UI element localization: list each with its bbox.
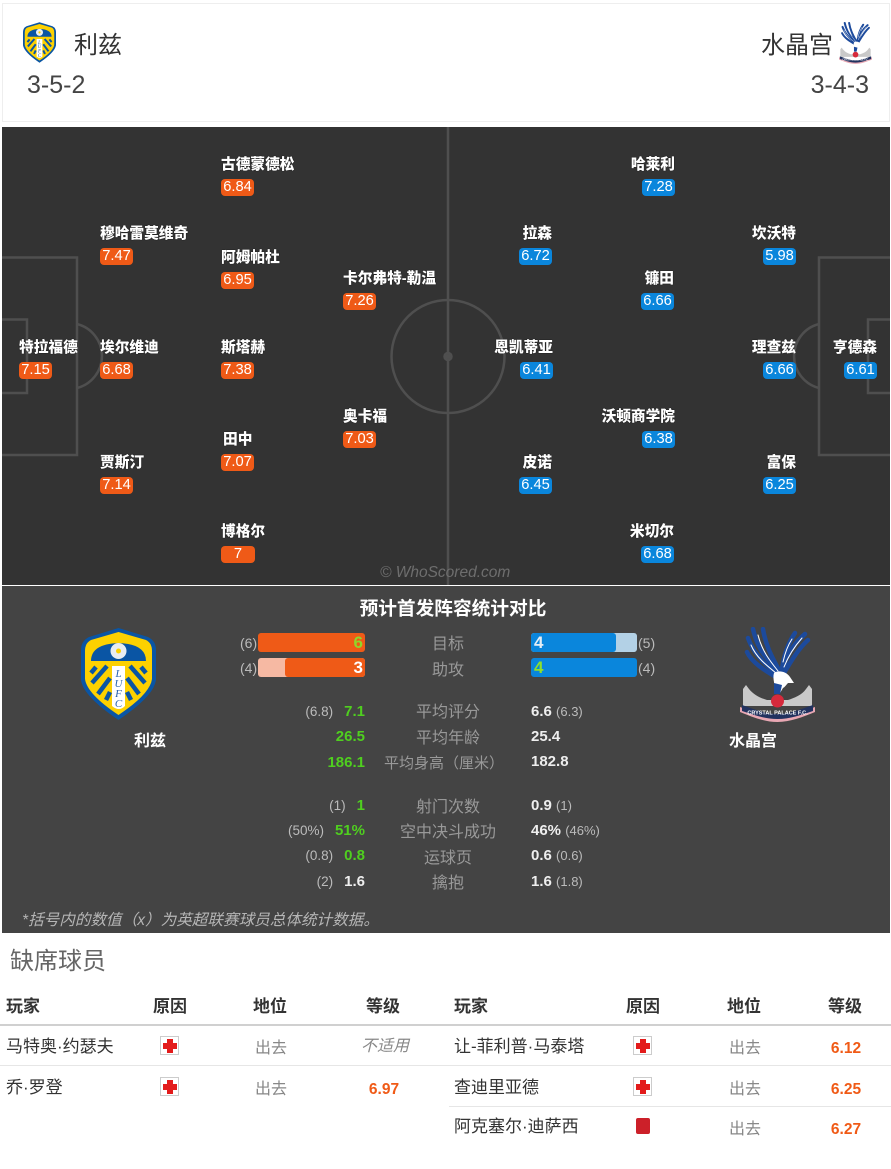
player: 拉森: 6.72: [521, 248, 550, 264]
column headers: 玩家: [6, 997, 40, 1016]
player: 拉森: [519, 224, 552, 265]
player: 亨德森: 6.61: [846, 362, 875, 378]
player: 斯塔赫: [221, 338, 265, 379]
player: 特拉福德: 特拉福德: [19, 340, 78, 356]
player: 古德蒙德松: 古德蒙德松: [221, 157, 294, 173]
label: average age: 平均年龄: [416, 730, 480, 747]
row: 马特奥·约瑟夫: [0, 1025, 449, 1065]
player: 埃尔维迪: 6.68: [102, 362, 131, 378]
away height: 182.8: [531, 753, 569, 770]
goals bar: away: [531, 633, 655, 652]
column headers: 地位: [253, 997, 287, 1016]
player: 理查兹: 理查兹: [752, 340, 796, 356]
row: 阿克塞尔·迪萨西: 出去: [729, 1121, 761, 1138]
home rating: (6.8) 7.1: [305, 703, 365, 720]
player: 田中: 7.07: [223, 454, 252, 470]
label: tackles: 擒抱: [432, 875, 464, 892]
away dribbles: 0.6 (0.6): [531, 847, 583, 864]
row: 查迪里亚德: 6.25: [831, 1081, 861, 1098]
assists bar: home: 3: [354, 658, 363, 677]
goals bar: away: (5): [638, 635, 655, 651]
player: 斯塔赫: 7.38: [223, 362, 252, 378]
footnote: *括号内的数值（x）为英超联赛球员总体统计数据。: [22, 912, 379, 929]
panel: away missing players table: [449, 990, 891, 1150]
goals bar: home: (6): [240, 635, 257, 651]
player: 贾斯汀: [100, 454, 144, 494]
player: 皮诺: 皮诺: [523, 455, 552, 471]
home height: 186.1: [327, 754, 365, 771]
icon: injury cross: [160, 1036, 179, 1055]
label: average height: 平均身高（厘米）: [384, 755, 504, 772]
player: 恩凯蒂亚: [494, 338, 553, 379]
player: 贾斯汀: 贾斯汀: [100, 455, 144, 471]
player: 亨德森: [833, 338, 877, 379]
column headers: 地位: [727, 997, 761, 1016]
row: 阿克塞尔·迪萨西: 阿克塞尔·迪萨西: [454, 1117, 579, 1136]
player: 镰田: 6.66: [643, 293, 672, 309]
away team name: 水晶宫: [761, 32, 833, 59]
column headers: [449, 990, 891, 1024]
assists bar: home: [240, 658, 365, 677]
player: 阿姆帕杜: [221, 248, 280, 289]
panel: pitch: [2, 127, 890, 585]
label: average rating: 平均评分: [416, 704, 480, 721]
goals bar: home: 6: [354, 633, 363, 652]
label: aerial duels: 空中决斗成功: [400, 824, 496, 841]
row: 查迪里亚德: 出去: [729, 1081, 761, 1098]
column headers: 等级: [828, 997, 862, 1016]
player: 博格尔: 7: [234, 546, 242, 562]
player: 古德蒙德松: [221, 156, 294, 196]
row: 让-菲利普·马泰塔: 让-菲利普·马泰塔: [454, 1037, 584, 1056]
home tackles: (2) 1.6: [317, 873, 365, 890]
home shots: (1) 1: [329, 797, 365, 814]
heading: missing players: 缺席球员: [10, 948, 106, 975]
player: 阿姆帕杜: 阿姆帕杜: [221, 250, 280, 266]
stats heading: 预计首发阵容统计对比: [360, 598, 546, 619]
column headers: 等级: [366, 997, 400, 1016]
row: 阿克塞尔·迪萨西: [449, 1107, 891, 1147]
player: 镰田: [641, 270, 674, 310]
player: 奥卡福: [343, 408, 387, 448]
row: 让-菲利普·马泰塔: 6.12: [831, 1040, 861, 1057]
row: 乔·罗登: 6.97: [369, 1081, 399, 1098]
away tackles: 1.6 (1.8): [531, 873, 583, 890]
player: 卡尔弗特-勒温: 卡尔弗特-勒温: [343, 271, 436, 287]
home formation: 3-5-2: [27, 71, 85, 99]
assists bar: away: [531, 658, 655, 677]
icon: Crystal Palace crest large: [740, 627, 815, 722]
player: 特拉福德: [19, 338, 78, 379]
column headers: 原因: [626, 997, 660, 1016]
column headers: [0, 990, 449, 1024]
panel: stats comparison: [2, 586, 890, 933]
away crest label: 水晶宫: [729, 733, 777, 750]
home age: 26.5: [336, 728, 365, 745]
player: 博格尔: 博格尔: [221, 524, 265, 540]
away aerials: 46% (46%): [531, 822, 600, 839]
player: 亨德森: 亨德森: [833, 340, 877, 356]
pitch markings: [2, 127, 890, 585]
row: 让-菲利普·马泰塔: [449, 1025, 891, 1065]
player: 皮诺: [519, 454, 552, 494]
player: 米切尔: 6.68: [643, 546, 672, 562]
player: 富保: 富保: [767, 455, 796, 471]
player: 理查兹: [752, 338, 796, 379]
icon: Leeds crest large: [81, 628, 156, 720]
home crest label: 利兹: [134, 733, 166, 750]
row: 乔·罗登: 出去: [255, 1081, 287, 1098]
icon: red card: [636, 1118, 650, 1134]
player: 哈莱利: 哈莱利: [631, 157, 675, 173]
away shots: 0.9 (1): [531, 797, 572, 814]
icon: injury cross: [633, 1077, 652, 1096]
player: 奥卡福: 奥卡福: [343, 409, 387, 425]
player: 米切尔: 米切尔: [630, 524, 674, 540]
player: 沃顿商学院: [602, 408, 675, 448]
row: 马特奥·约瑟夫: 出去: [255, 1040, 287, 1057]
icon: injury cross: [160, 1077, 179, 1096]
column headers: 玩家: [454, 997, 488, 1016]
goals bar: away: 4: [534, 633, 543, 652]
icon: Crystal Palace crest small: [839, 22, 872, 64]
player: 坎沃特: 5.98: [765, 248, 794, 264]
icon: Leeds crest small: [23, 22, 56, 63]
player: 穆哈雷莫维奇: 7.47: [102, 248, 131, 264]
assists bar: away: (4): [638, 660, 655, 676]
panel: home missing players table: [0, 990, 449, 1110]
player: 穆哈雷莫维奇: [100, 224, 188, 265]
row: 阿克塞尔·迪萨西: 6.27: [831, 1121, 861, 1138]
home dribbles: (0.8) 0.8: [305, 847, 365, 864]
label: dribbles: 运球页: [424, 850, 472, 867]
label: assists: 助攻: [432, 662, 464, 679]
player: 坎沃特: [752, 224, 796, 265]
player: 镰田: 镰田: [645, 271, 674, 287]
icon: injury cross: [633, 1036, 652, 1055]
row: 乔·罗登: [0, 1066, 449, 1106]
player: 斯塔赫: 斯塔赫: [221, 340, 265, 356]
watermark: © WhoScored.com: [380, 564, 510, 581]
player: 贾斯汀: 7.14: [102, 477, 131, 493]
player: 埃尔维迪: 埃尔维迪: [100, 340, 159, 356]
row: 马特奥·约瑟夫: 不适用: [361, 1038, 409, 1055]
player: 哈莱利: [631, 156, 675, 196]
row: 马特奥·约瑟夫: 马特奥·约瑟夫: [6, 1037, 114, 1056]
player: 特拉福德: 7.15: [21, 362, 50, 378]
home team name: 利兹: [74, 32, 122, 59]
row: 查迪里亚德: [449, 1066, 891, 1106]
player: 富保: 6.25: [765, 477, 794, 493]
player: 坎沃特: 坎沃特: [752, 226, 796, 242]
player: 卡尔弗特-勒温: 7.26: [345, 293, 374, 309]
away formation: 3-4-3: [811, 71, 869, 99]
player: 田中: [221, 430, 254, 471]
player: 恩凯蒂亚: 恩凯蒂亚: [494, 340, 553, 356]
row: 查迪里亚德: 查迪里亚德: [454, 1078, 539, 1097]
away rating: 6.6 (6.3): [531, 703, 583, 720]
player: 阿姆帕杜: 6.95: [223, 272, 252, 288]
row: 乔·罗登: 乔·罗登: [6, 1078, 63, 1097]
player: 沃顿商学院: 沃顿商学院: [602, 409, 675, 425]
player: 哈莱利: 7.28: [644, 179, 673, 195]
player: 拉森: 拉森: [523, 226, 552, 242]
player: 沃顿商学院: 6.38: [644, 431, 673, 447]
player: 埃尔维迪: [100, 339, 159, 379]
player: 皮诺: 6.45: [521, 477, 550, 493]
player: 奥卡福: 7.03: [345, 431, 374, 447]
label: goals: 目标: [432, 636, 464, 653]
column headers: 原因: [153, 997, 187, 1016]
home aerials: (50%) 51%: [288, 822, 365, 839]
assists bar: away: 4: [534, 658, 543, 677]
player: 田中: 田中: [223, 432, 252, 448]
label: shots on target: 射门次数: [416, 799, 480, 816]
goals bar: home: [240, 633, 365, 652]
player: 博格尔: [221, 522, 265, 563]
player: 卡尔弗特-勒温: [343, 270, 436, 310]
player: 理查兹: 6.66: [765, 362, 794, 378]
assists bar: home: (4): [240, 660, 257, 676]
row: 让-菲利普·马泰塔: 出去: [729, 1040, 761, 1057]
player: 米切尔: [630, 522, 674, 563]
player: 恩凯蒂亚: 6.41: [522, 362, 551, 378]
player: 富保: [763, 454, 796, 494]
panel: match header: [2, 3, 890, 122]
away age: 25.4: [531, 728, 560, 745]
player: 穆哈雷莫维奇: 穆哈雷莫维奇: [100, 226, 188, 242]
player: 古德蒙德松: 6.84: [223, 179, 252, 195]
